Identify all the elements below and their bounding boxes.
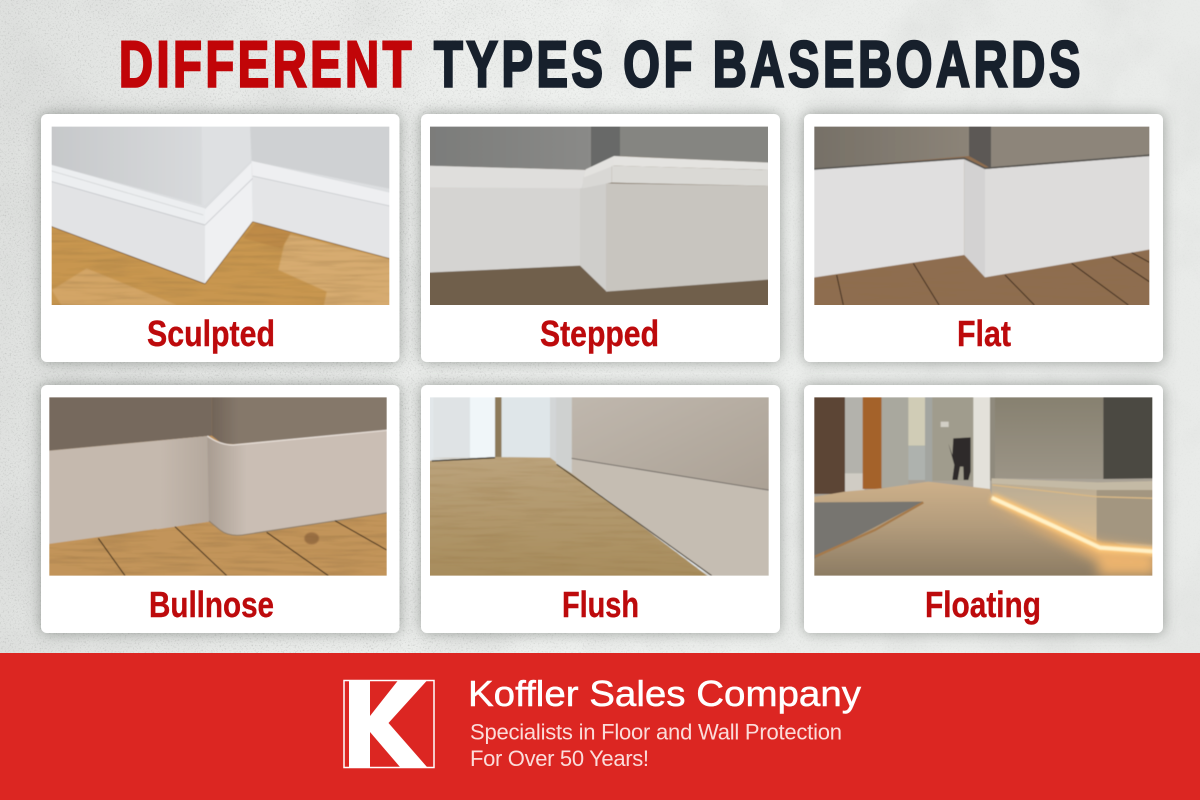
photo: flush baseboard	[427, 394, 772, 579]
photo: floating baseboard with LED glow	[811, 394, 1156, 579]
panel: Floating	[804, 385, 1163, 633]
panel: Sculpted	[41, 114, 400, 362]
photo: sculpted baseboard	[48, 123, 393, 308]
panel: Bullnose	[41, 385, 400, 633]
photo: bullnose baseboard	[46, 394, 390, 579]
tagline: Specialists in Floor and Wall Protection	[470, 720, 842, 744]
panel: Flat	[804, 114, 1163, 362]
title	[119, 28, 1084, 100]
label: Bullnose: Bullnose	[149, 584, 274, 625]
photo: stepped baseboard	[427, 123, 771, 308]
company name: Koffler Sales Company	[468, 673, 861, 714]
panel: Stepped	[421, 114, 780, 362]
title: DIFFERENT	[119, 28, 415, 100]
tagline: For Over 50 Years!	[470, 746, 649, 771]
label: Flat: Flat	[957, 313, 1011, 354]
label: Flush: Flush	[562, 584, 639, 625]
panel: Flush	[421, 385, 780, 633]
label: Floating: Floating	[925, 584, 1041, 625]
photo: flat baseboard	[811, 123, 1153, 308]
label: Sculpted: Sculpted	[147, 313, 275, 354]
icon: Koffler K logo	[344, 680, 434, 768]
label: Stepped: Stepped	[540, 313, 659, 354]
tagline	[470, 720, 842, 771]
footer band	[0, 653, 1200, 800]
